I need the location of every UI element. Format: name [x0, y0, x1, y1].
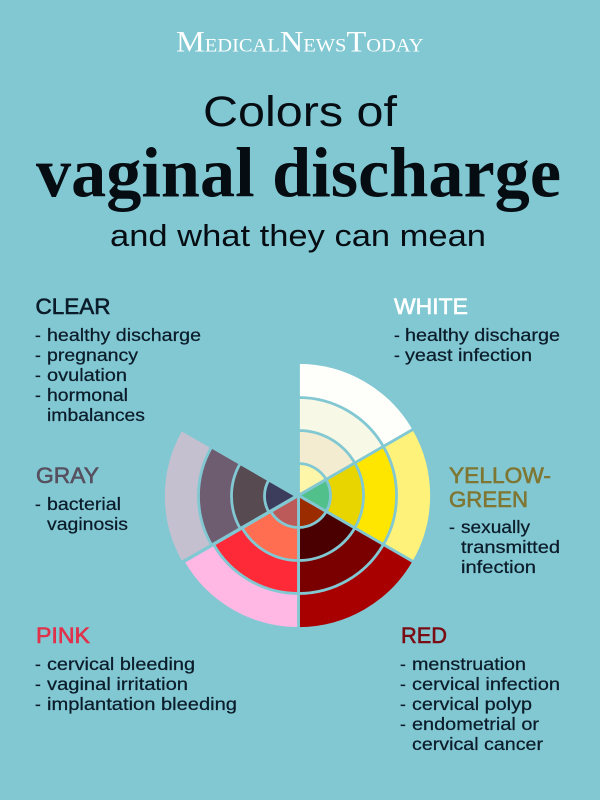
panel: red: cervical cancer — [412, 734, 543, 754]
panel: clear — [35, 294, 201, 425]
panel: red: cervical polyp — [412, 694, 532, 714]
heading: vaginal discharge: vaginal discharge — [36, 134, 561, 212]
panel: clear: - — [35, 365, 41, 385]
panel: yellow-green — [449, 463, 560, 577]
panel: white: healthy discharge — [405, 325, 560, 345]
panel: red — [400, 623, 560, 754]
panel: red: endometrial or — [412, 714, 539, 734]
panel: clear: - — [35, 325, 41, 345]
wheel segment: red — [298, 496, 414, 628]
panel: red: cervical infection — [412, 674, 560, 694]
panel: pink: PINK — [36, 623, 90, 648]
panel: pink: cervical bleeding — [47, 654, 195, 674]
panel: clear: ovulation — [47, 365, 127, 385]
panel: red: - — [400, 714, 406, 734]
panel: red: menstruation — [412, 654, 526, 674]
panel: white: yeast infection — [405, 345, 532, 365]
panel: gray: - — [35, 494, 41, 514]
wheel segment: white — [298, 362, 414, 496]
panel: red: - — [400, 694, 406, 714]
panel: gray — [35, 463, 128, 534]
panel: clear: - — [35, 345, 41, 365]
logo: Medical News Today: MEDICALNEWSTODAY — [176, 26, 424, 58]
chart: polar color wheel — [163, 362, 432, 628]
panel: yellow-green: sexually — [461, 517, 530, 537]
panel: white: - — [394, 325, 400, 345]
subheading: and what they can mean — [110, 218, 486, 253]
panel: pink: - — [35, 674, 41, 694]
panel: gray: GRAY — [36, 463, 99, 488]
panel: pink: - — [35, 694, 41, 714]
panel: yellow-green: transmitted — [461, 537, 560, 557]
panel: gray: bacterial — [47, 494, 121, 514]
panel: clear: imbalances — [47, 405, 145, 425]
panel: yellow-green: GREEN — [449, 487, 528, 512]
panel: clear: - — [35, 385, 41, 405]
panel: yellow-green: - — [449, 517, 455, 537]
heading: Colors of: Colors of — [203, 88, 398, 136]
wheel segment: pink — [183, 496, 298, 628]
panel: red: RED — [401, 623, 447, 648]
panel: yellow-green: infection — [461, 557, 536, 577]
panel: white: WHITE — [394, 294, 468, 319]
panel: pink: vaginal irritation — [47, 674, 188, 694]
panel: red: - — [400, 674, 406, 694]
panel: red: - — [400, 654, 406, 674]
wheel segment: yellow-green — [298, 429, 432, 562]
panel: yellow-green: YELLOW- — [449, 463, 551, 488]
panel: white: - — [394, 345, 400, 365]
wheel segment: gray — [163, 430, 296, 562]
panel: gray: vaginosis — [47, 514, 128, 534]
panel: pink — [35, 623, 237, 714]
panel: pink: - — [35, 654, 41, 674]
panel: clear: pregnancy — [47, 345, 138, 365]
panel: clear: hormonal — [47, 385, 128, 405]
panel: clear: healthy discharge — [47, 325, 201, 345]
panel: white — [394, 294, 560, 365]
panel: pink: implantation bleeding — [47, 694, 237, 714]
panel: clear: CLEAR — [36, 294, 110, 319]
